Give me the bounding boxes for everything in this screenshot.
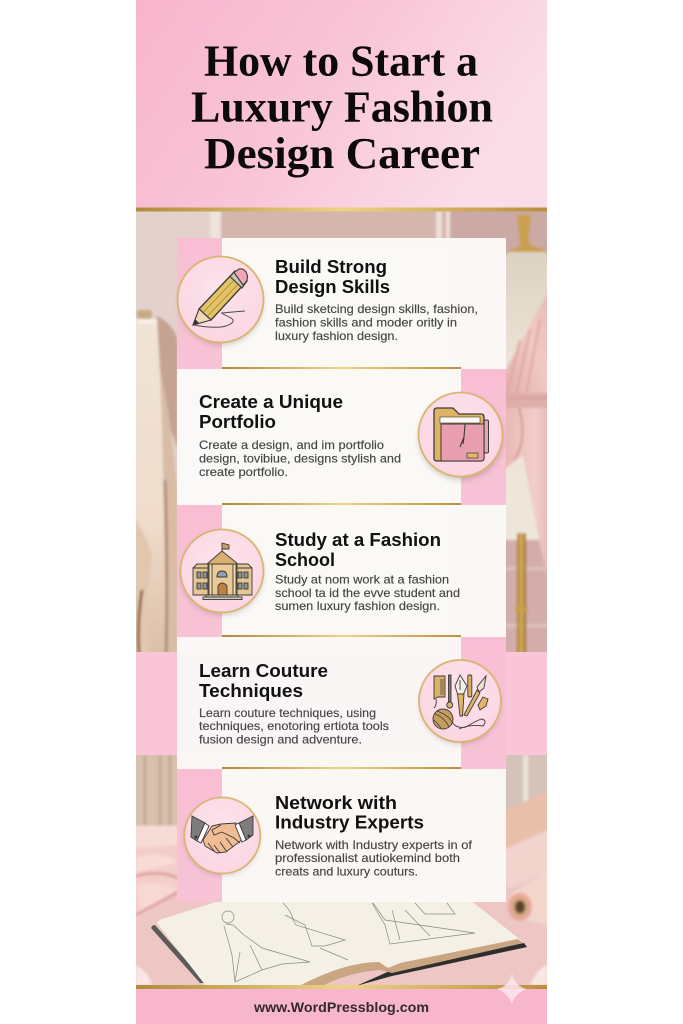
- gold line: bottom: [136, 985, 547, 989]
- footer background: [136, 988, 547, 1024]
- heading: Techniques: [199, 681, 303, 701]
- gold divider: [222, 367, 461, 370]
- title: How to Start a: [204, 36, 478, 86]
- gold line: top: [136, 208, 547, 212]
- text block: school ta id the evve student and: [275, 586, 460, 600]
- text block: [275, 572, 460, 613]
- text block: [275, 302, 478, 343]
- text block: fusion design and adventure.: [199, 732, 362, 746]
- heading: Learn Couture: [199, 661, 328, 681]
- panel: step 4: [177, 637, 506, 770]
- text block: Create a design, and im portfolio: [199, 438, 384, 452]
- text block: creats and luxury couturs.: [275, 864, 418, 878]
- icon: handshake: [184, 798, 260, 875]
- text block: [199, 706, 389, 746]
- panel: step 2: [177, 369, 506, 506]
- heading: [275, 793, 424, 832]
- heading: Industry Experts: [275, 812, 424, 832]
- gold divider: [222, 767, 461, 770]
- heading: School: [275, 550, 335, 570]
- icon: folder: [418, 392, 503, 480]
- heading: Build Strong: [275, 257, 387, 277]
- heading: Create a Unique: [199, 392, 343, 412]
- pink band behind step 4: [136, 652, 547, 755]
- mannequin: [506, 214, 547, 652]
- icon: couture tools: [419, 660, 501, 744]
- heading: Portfolio: [199, 412, 276, 432]
- text block: Learn couture techniques, using: [199, 706, 376, 720]
- sketch figures: [222, 903, 475, 982]
- pink strip: [177, 769, 222, 902]
- text block: luxury fashion design.: [275, 329, 398, 343]
- heading: [275, 530, 441, 570]
- heading: [199, 661, 328, 701]
- icon: sparkle: [497, 973, 527, 1004]
- footer url: www.WordPressblog.com: [253, 999, 429, 1015]
- text block: Study at nom work at a fashion: [275, 572, 449, 586]
- heading: Network with: [275, 793, 397, 813]
- text block: create portfolio.: [199, 465, 288, 479]
- background photo: atelier scene: [130, 205, 550, 990]
- panel: step 1: [177, 238, 506, 370]
- icon: pencil: [178, 256, 264, 345]
- gold divider: [222, 635, 461, 638]
- text block: design, tovibiue, designs stylish and: [199, 452, 401, 466]
- heading: Study at a Fashion: [275, 530, 441, 550]
- heading: Design Skills: [275, 277, 390, 297]
- title: [191, 36, 493, 178]
- text block: fashion skills and moder oritly in: [275, 316, 457, 330]
- text block: techniques, enotoring ertiota tools: [199, 719, 389, 733]
- pink strip: [461, 369, 506, 505]
- heading: [275, 257, 390, 297]
- header background: [136, 0, 547, 208]
- text block: sumen luxury fashion design.: [275, 599, 440, 613]
- text block: [199, 438, 401, 479]
- gold divider: [222, 503, 461, 506]
- panel: step 5: [177, 769, 506, 902]
- text block: professionalist autiokemind both: [275, 851, 460, 865]
- text block: Network with Industry experts in of: [275, 838, 473, 852]
- title: Luxury Fashion: [191, 82, 493, 132]
- text block: Build sketcing design skills, fashion,: [275, 302, 478, 316]
- heading: [199, 392, 343, 432]
- title: Design Career: [204, 129, 480, 178]
- pink strip: [177, 238, 222, 369]
- pink strip: [461, 637, 506, 769]
- text block: [275, 838, 473, 878]
- lower background: [130, 750, 550, 990]
- panel: step 3: [177, 505, 506, 638]
- icon: school building: [180, 530, 264, 615]
- sketchbook: [151, 900, 527, 986]
- pink strip: [177, 505, 222, 637]
